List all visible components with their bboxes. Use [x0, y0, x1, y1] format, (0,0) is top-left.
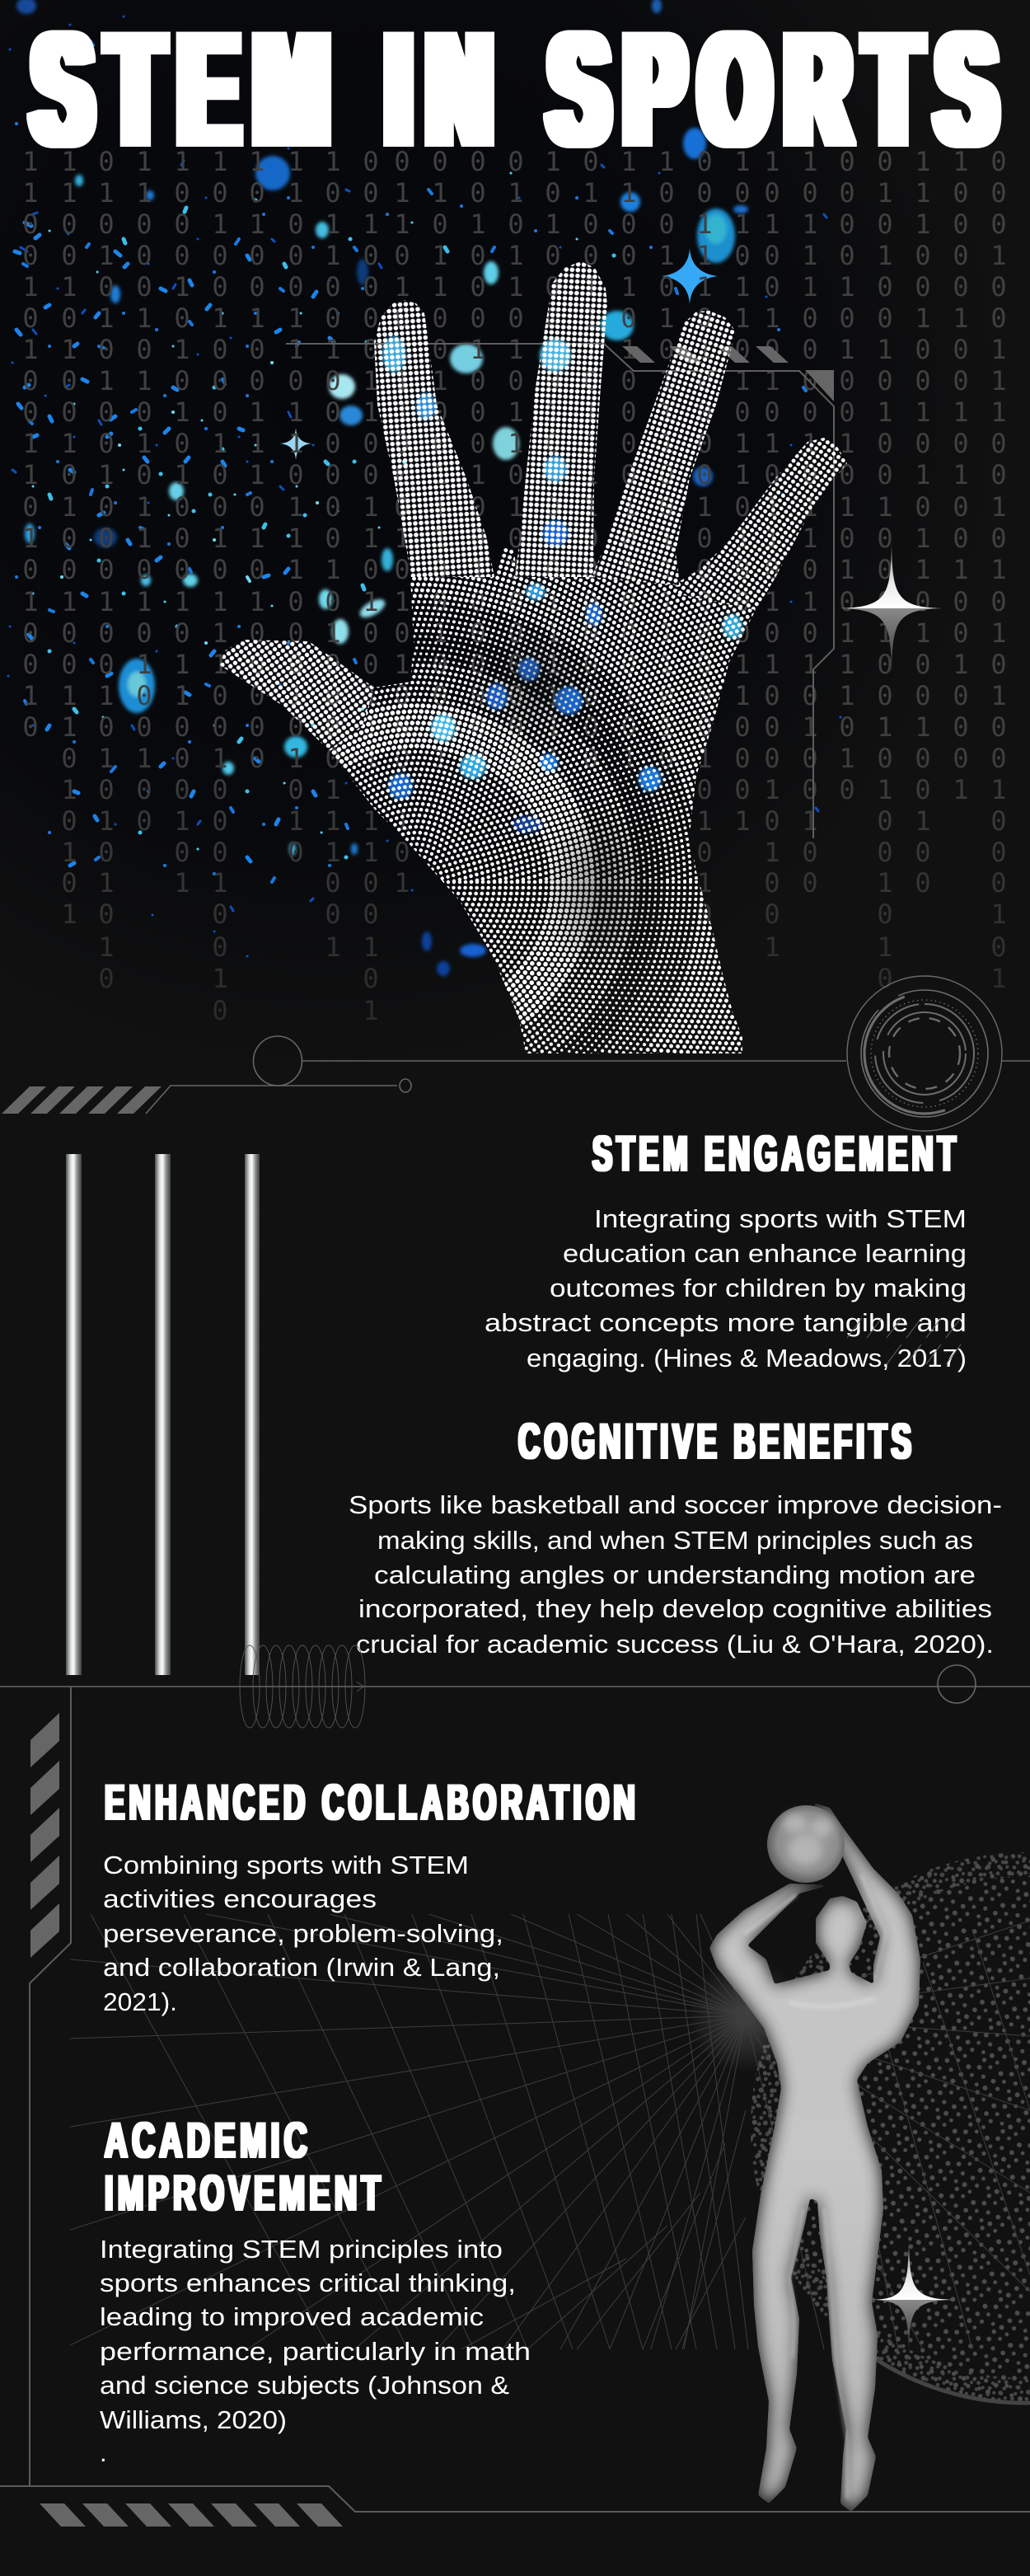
icon: silver sparkle top: [838, 542, 943, 674]
text block: STEM engagement: education can enhance learning: [563, 1239, 967, 1268]
binary digit matrix: 110010000011010110110110000: [22, 271, 1007, 303]
icon: pale blue sparkle: [280, 428, 311, 460]
text block: STEM engagement: abstract concepts more tangible and: [485, 1308, 967, 1337]
palm and wrist contour dots: [329, 548, 756, 1053]
divider with small circle: [254, 1036, 1030, 1086]
binary digit matrix: 000010110110011101000001111: [22, 396, 1007, 428]
left chevron stripes: [30, 1713, 59, 1958]
text block: cognitive benefits: Sports like basketball and soccer improve decision-: [349, 1490, 1002, 1519]
text block: enhanced collaboration: [103, 1851, 503, 2016]
text block: cognitive benefits: making skills, and when STEM principles such as: [377, 1526, 973, 1555]
finger: little finger: [374, 300, 494, 577]
heading: ACADEMIC IMPROVEMENT: ACADEMIC: [105, 2113, 311, 2168]
binary digit matrix: 001101110000000101011000110: [22, 303, 1007, 334]
binary digit matrix: 101010100001100100010000110: [22, 459, 1007, 490]
finger: middle finger: [515, 261, 607, 577]
binary digit matrix: 0 1 0 0 1: [22, 963, 1007, 994]
finger: ring finger: [592, 311, 736, 585]
binary digit matrix: 01010 1111 1101 01 0: [22, 805, 1007, 837]
figure: silver athlete shooting a ball: [709, 1803, 920, 2512]
binary digit matrix: [22, 146, 1007, 1026]
binary digit matrix: 010100010101010110101111001: [22, 491, 1007, 523]
icon: blue sparkle: [662, 248, 718, 304]
binary digit matrix: 01 11 001 1 00 10 0: [22, 867, 1007, 899]
binary digit matrix: 111010010100001010010010001: [22, 680, 1007, 711]
text block: academic improvement: Integrating STEM principles into: [100, 2235, 503, 2264]
text block: cognitive benefits: incorporated, they help develop cognitive abilities: [358, 1594, 992, 1623]
binary digit matrix: 110111111000001011011100110: [22, 146, 1007, 177]
text block: academic improvement: [100, 2235, 531, 2467]
binary digit matrix: 010000000100001001000101100: [22, 711, 1007, 743]
text block: cognitive benefits: [349, 1490, 1002, 1659]
text block: STEM engagement: Integrating sports with STEM: [594, 1204, 967, 1233]
heading: ENHANCED COLLABORATION: ENHANCED COLLABORATION: [105, 1775, 639, 1830]
text block: academic improvement: .: [100, 2438, 107, 2467]
icon: concentric tech ring: [847, 976, 1002, 1131]
heading: ACADEMIC IMPROVEMENT: [105, 2113, 385, 2221]
section divider with circle: [0, 1665, 1030, 1703]
text block: enhanced collaboration: perseverance, problem-solving,: [103, 1919, 503, 1948]
text block: STEM engagement: engaging. (Hines & Meadows, 2017): [527, 1344, 967, 1372]
binary digit matrix: 10 0 00 0 0 0 1: [22, 899, 1007, 930]
heading: ACADEMIC IMPROVEMENT: IMPROVEMENT: [105, 2165, 385, 2221]
hatch marks over text: [847, 1318, 961, 1364]
dotted sphere: [751, 1852, 1030, 2403]
binary digit matrix: 000000011000110011000010111: [22, 554, 1007, 585]
text block: enhanced collaboration: activities encourages: [103, 1884, 377, 1913]
figure highlights: [746, 1875, 886, 2498]
text block: STEM engagement: [485, 1204, 967, 1372]
binary digit matrix: 000111000010001001011110010: [22, 649, 1007, 680]
text block: STEM engagement: outcomes for children by making: [550, 1274, 967, 1302]
binary digit matrix: 01101010101011010100010000: [22, 743, 1007, 774]
ball: [767, 1805, 845, 1883]
blue particle splatter: [8, 0, 840, 976]
dark particle field backdrop: [0, 0, 1030, 1072]
text block: academic improvement: sports enhances critical thinking,: [100, 2269, 516, 2297]
metal bars: [66, 1154, 260, 1675]
binary digit matrix: 111100010011010110000001100: [22, 177, 1007, 209]
binary digit matrix: 10 00 0110 0 10 00 0: [22, 837, 1007, 868]
figure body: [709, 1803, 920, 2512]
text block: academic improvement: leading to improved academic: [100, 2302, 484, 2331]
icon: halftone dotted hand: [220, 262, 847, 1053]
left frame line: [0, 1687, 1030, 2512]
icon: wire coil: [240, 1645, 365, 1728]
finger: thumb: [220, 640, 374, 750]
text block: cognitive benefits: calculating angles or understanding motion are: [374, 1560, 976, 1589]
binary digit matrix: 1 0 11 1 1 0: [22, 931, 1007, 963]
binary digit matrix: 100101110111001001011100100: [22, 523, 1007, 554]
text block: academic improvement: and science subjects (Johnson &: [100, 2371, 509, 2400]
perspective grid: [70, 1914, 1030, 2349]
binary digit matrix: 0 1: [22, 995, 1007, 1026]
icon: silver sparkle bottom: [872, 2241, 954, 2352]
binary digit matrix: 111111100110001001001100000: [22, 586, 1007, 617]
text block: enhanced collaboration: and collaboration (Irwin & Lang,: [103, 1953, 500, 1982]
binary digit matrix: 110101110000010101011110000: [22, 428, 1007, 459]
binary digit matrix: 001000001001010001100101001: [22, 240, 1007, 271]
binary digit matrix: 000001001001001001000011101: [22, 617, 1007, 649]
text block: academic improvement: performance, particularly in math: [100, 2337, 531, 2366]
text block: cognitive benefits: crucial for academic success (Liu & O'Hara, 2020).: [356, 1630, 994, 1659]
text block: enhanced collaboration: Combining sports with STEM: [103, 1851, 469, 1879]
bottom stripes: [40, 2503, 343, 2527]
finger: index finger: [676, 438, 847, 610]
text block: academic improvement: Williams, 2020): [100, 2405, 287, 2434]
binary digit matrix: 001100000111000001011000001: [22, 365, 1007, 396]
binary digit matrix: 110010011010110110100011001: [22, 334, 1007, 365]
binary digit matrix: 000001101110101000111100100: [22, 209, 1007, 240]
text block: enhanced collaboration: 2021).: [103, 1987, 177, 2016]
blue glows seen through the hand: [382, 336, 742, 833]
striped connector lower left: [2, 1079, 411, 1114]
HUD frame lines behind the hand: [286, 344, 834, 838]
hand shadow shading: [494, 643, 643, 956]
binary digit matrix: 10000 01 001001011: [22, 774, 1007, 805]
